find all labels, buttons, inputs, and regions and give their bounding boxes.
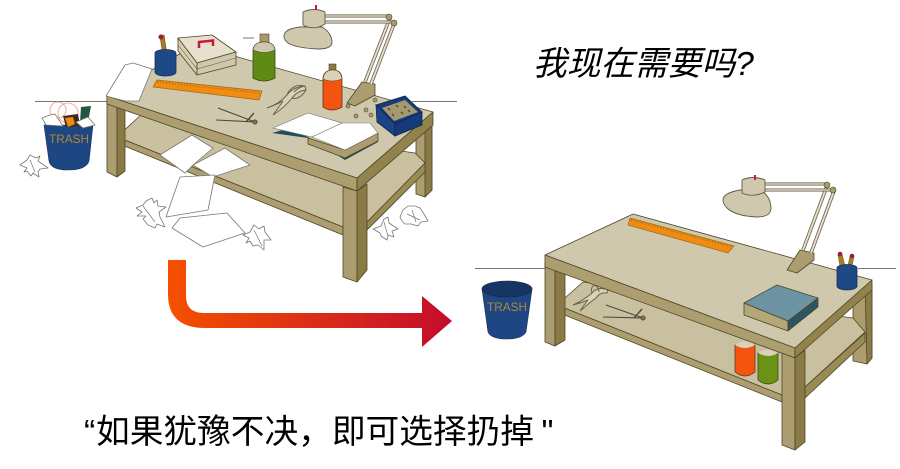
compass (216, 108, 257, 124)
closed book (744, 285, 818, 331)
empty trash can (482, 281, 532, 339)
lamp on tidy desk (723, 175, 836, 273)
illustration: cluttered desk (20, 5, 433, 282)
full trash can (42, 102, 95, 170)
quote caption: 如果犹豫不决，即可选择扔掉 (96, 413, 534, 451)
tidy desk top (545, 214, 872, 358)
blue box of tacks (376, 96, 422, 136)
pliers on shelf (573, 285, 608, 311)
pencil cup (155, 34, 176, 76)
front leg (343, 184, 367, 282)
ruler (153, 80, 262, 100)
orange can on shelf (735, 342, 755, 376)
pencil cup on tidy desk (837, 252, 857, 290)
curved arrow (168, 260, 452, 347)
first aid style box (178, 35, 236, 75)
pliers (267, 86, 306, 115)
quote caption: “ (84, 413, 95, 451)
horizon line left (35, 38, 457, 102)
green bottle (253, 34, 275, 81)
question heading: 我现在需要吗? (533, 45, 754, 83)
ruler on tidy desk (628, 218, 734, 253)
front leg of tidy desk (782, 350, 805, 450)
green can on shelf (758, 350, 778, 384)
crumpled paper balls (20, 155, 428, 250)
back leg and shelf of tidy desk (545, 262, 872, 402)
desk top (107, 45, 433, 191)
compass on shelf (603, 305, 645, 320)
orange spray can (323, 64, 342, 110)
loose paper on desk corner (106, 63, 152, 101)
illustration: tidy desk (482, 175, 872, 450)
empty trash can: TRASH (487, 300, 527, 314)
tacks on desk (346, 98, 377, 118)
back legs and shelf of cluttered desk (107, 97, 432, 235)
full trash can: TRASH (49, 132, 89, 146)
open book (272, 113, 378, 160)
horizon line right (475, 268, 896, 270)
desk lamp (284, 5, 397, 106)
quote caption: " (542, 413, 553, 451)
papers falling from the desk (160, 135, 250, 247)
